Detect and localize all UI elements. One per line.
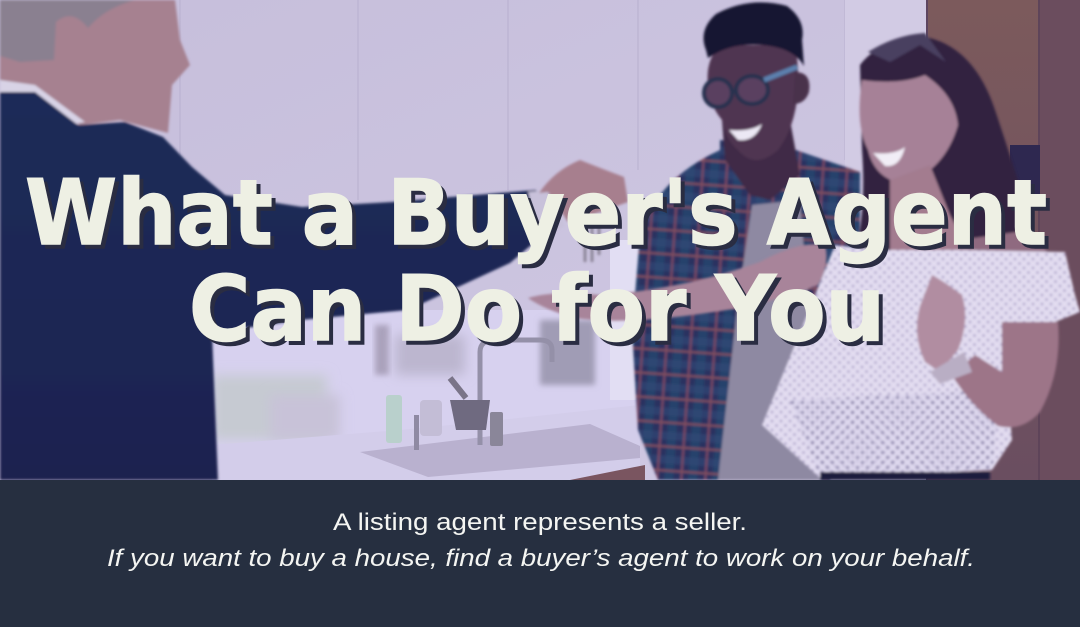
agent cuff: [528, 190, 565, 240]
title text: Can Do for You: [189, 257, 885, 362]
watch: [930, 352, 972, 384]
shirt: [632, 140, 860, 480]
chest: [890, 165, 975, 265]
glasses: [704, 67, 797, 107]
title: [25, 161, 1051, 366]
shirt collar: [0, 80, 85, 125]
wood panel: [926, 0, 1080, 480]
dark trousers: [820, 472, 990, 480]
bottom band: [0, 480, 1080, 627]
woman's reaching arm: [528, 244, 826, 321]
window and counter: [212, 240, 645, 480]
sunglasses: [868, 33, 946, 62]
agent: [0, 0, 628, 480]
couple: woman: [528, 33, 1080, 480]
woman's right arm: [952, 322, 1059, 427]
kitchen wall: [0, 0, 1080, 480]
agent hand: [539, 160, 628, 222]
title text: [25, 161, 1047, 362]
face: [860, 75, 958, 184]
title shadow: Can Do for You: [193, 261, 889, 366]
keys: [585, 225, 599, 262]
title shadow: [29, 165, 1051, 366]
hair: [845, 38, 1032, 280]
agent head: [0, 0, 190, 133]
jacket: [0, 92, 556, 480]
tee: [718, 200, 822, 480]
lace top: [762, 245, 1080, 478]
caption line 1: A listing agent represents a seller.: [333, 509, 747, 536]
couple: man: [632, 2, 860, 480]
woman's hand: [917, 275, 965, 372]
caption line 2: If you want to buy a house, find a buyer’s agent to work on your behalf.: [107, 545, 975, 572]
head: [708, 45, 798, 160]
hair: [704, 2, 804, 66]
photo background: [0, 0, 1080, 480]
agent hair: [0, 0, 135, 62]
